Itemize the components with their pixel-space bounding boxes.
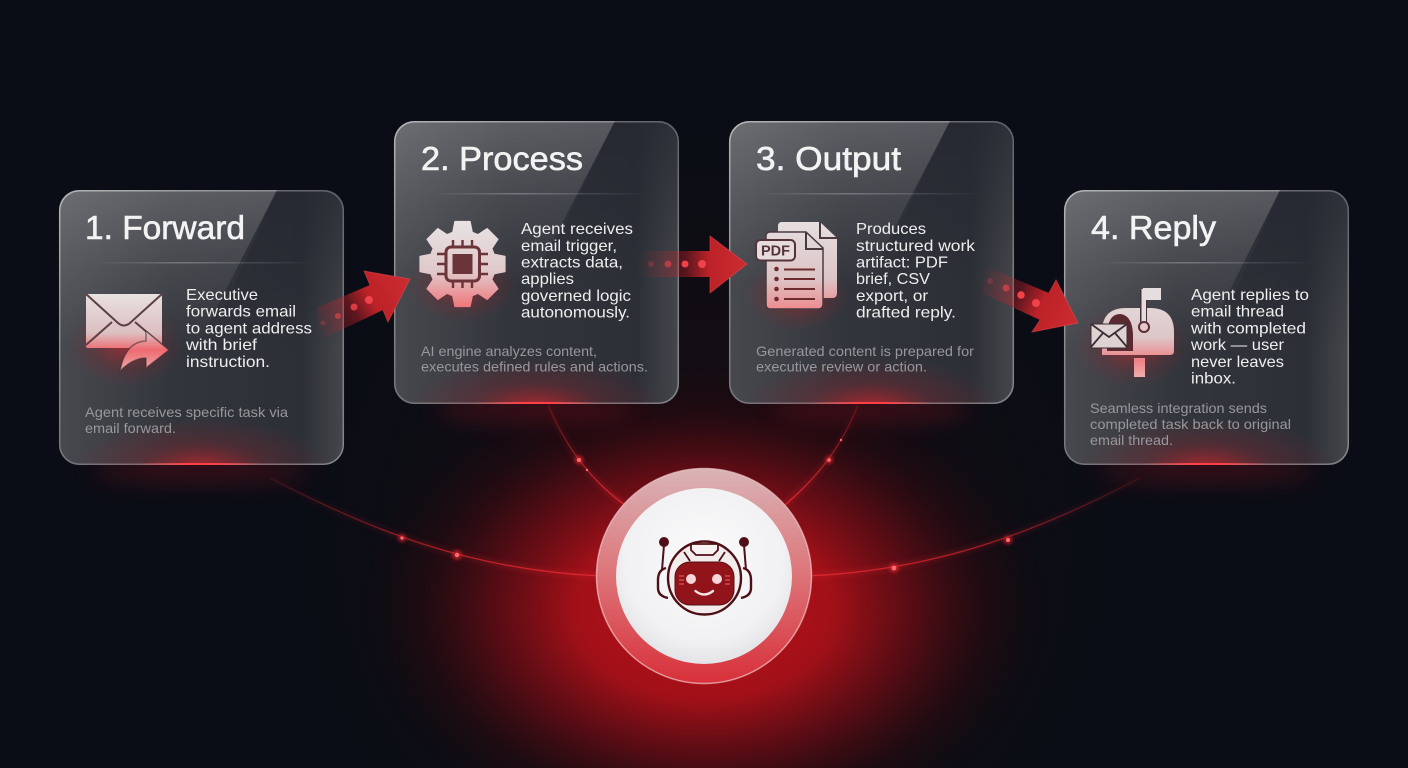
caption: Agent receives specific task via	[85, 405, 288, 420]
description: Produces	[856, 221, 926, 238]
caption: Generated content is prepared for	[756, 344, 974, 359]
heading: 1. Forward	[85, 209, 245, 246]
panel: 1. Forward	[58, 190, 344, 465]
infographic canvas	[58, 121, 1349, 768]
description: email trigger,	[521, 238, 617, 255]
description: autonomously.	[521, 304, 630, 322]
caption	[1090, 401, 1291, 448]
icon: gear with chip	[407, 222, 517, 323]
description: brief, CSV	[856, 271, 930, 288]
description: work — user	[1190, 337, 1284, 354]
description: Agent receives	[521, 221, 633, 238]
heading: 3. Output	[756, 140, 901, 177]
icon: mailbox with envelope	[1074, 288, 1190, 387]
description	[856, 221, 975, 322]
panel: 4. Reply	[1064, 190, 1349, 465]
description	[521, 221, 633, 322]
caption	[85, 405, 288, 436]
caption	[756, 344, 974, 374]
arrow: Forward to Process	[318, 271, 410, 341]
description: structured work	[856, 238, 975, 255]
icon: PDF documents: PDF	[761, 244, 790, 260]
hub ring	[596, 468, 812, 684]
description: inbox.	[1191, 370, 1236, 388]
description: export, or	[856, 288, 928, 305]
description	[185, 287, 312, 371]
caption: AI engine analyzes content,	[421, 344, 597, 359]
description: forwards email	[186, 304, 296, 320]
caption	[421, 344, 648, 374]
hub disc	[616, 488, 792, 664]
panel: 2. Process	[394, 121, 679, 404]
icon: forwarded envelope	[67, 294, 183, 387]
caption: email thread.	[1090, 433, 1173, 448]
icon: PDF documents	[745, 222, 849, 331]
description: extracts data,	[521, 254, 623, 272]
connector lines to the agent hub	[270, 405, 1140, 576]
caption: completed task back to original	[1090, 417, 1291, 432]
description: email thread	[1191, 304, 1284, 320]
description	[1190, 287, 1309, 388]
arrow: Process to Output	[640, 236, 747, 293]
caption: executive review or action.	[756, 360, 927, 374]
caption: executes defined rules and actions.	[421, 360, 648, 374]
description: instruction.	[186, 354, 270, 371]
caption: Seamless integration sends	[1090, 401, 1267, 416]
description: applies	[521, 271, 574, 288]
connector nodes	[398, 439, 1012, 573]
description: with completed	[1190, 320, 1306, 338]
description: never leaves	[1191, 354, 1284, 371]
description: to agent address	[186, 320, 312, 338]
description: drafted reply.	[856, 304, 956, 322]
arrow: Output to Reply	[982, 265, 1078, 332]
description: Executive	[186, 287, 258, 304]
heading: 2. Process	[421, 140, 583, 177]
agent hub	[596, 468, 812, 684]
panel: 3. Output	[728, 121, 1014, 404]
description: Agent replies to	[1191, 287, 1309, 304]
heading: 4. Reply	[1091, 209, 1217, 246]
description: artifact: PDF	[856, 254, 948, 272]
icon: robot	[658, 537, 751, 614]
description: governed logic	[521, 288, 631, 305]
caption: email forward.	[85, 421, 176, 436]
description: with brief	[185, 337, 258, 354]
